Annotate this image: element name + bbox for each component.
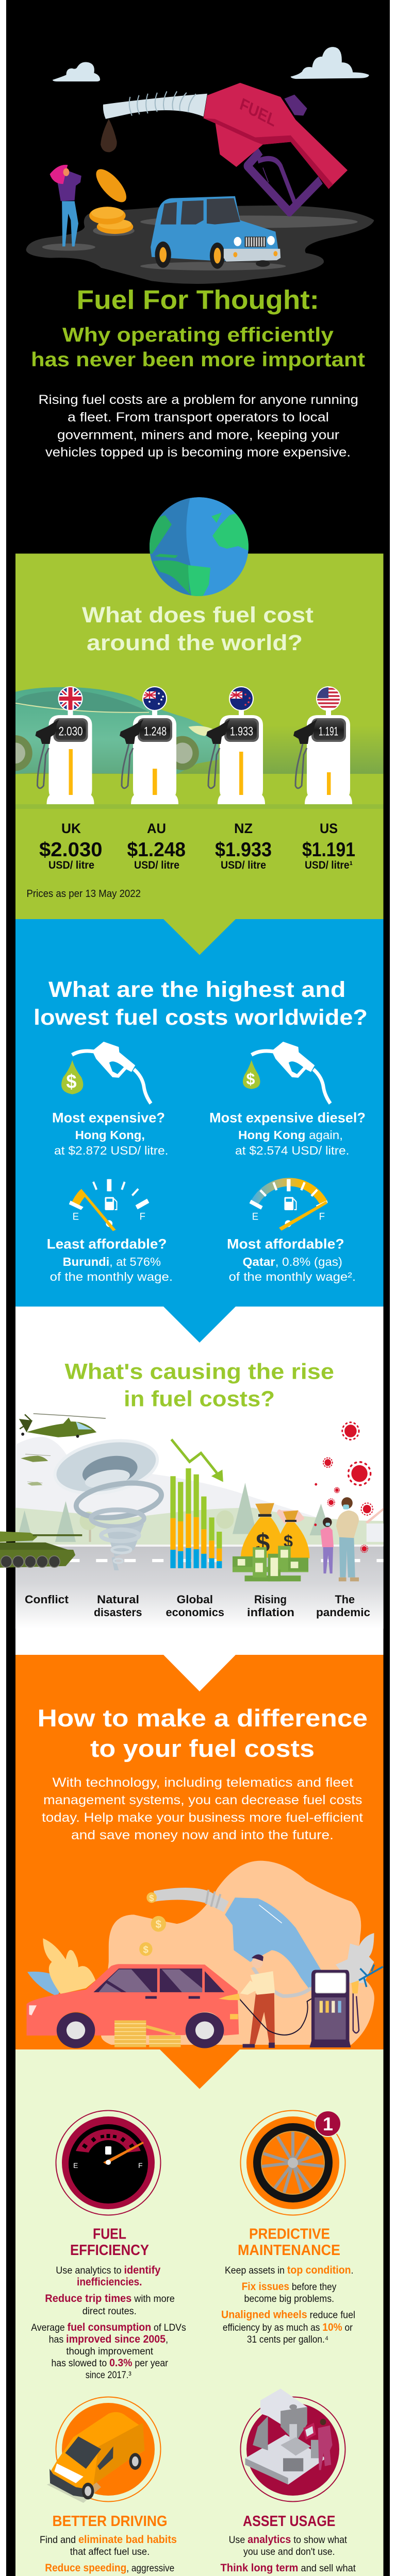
icon: helicopters [20, 1414, 106, 1486]
title: Fuel For Thought: [76, 285, 319, 315]
price: NZ: NZ [234, 821, 253, 836]
icon: fuel nozzle with large dollar drop: $ [66, 1071, 77, 1092]
icon: full fuel gauge: F [319, 1211, 325, 1222]
nozzle handle [247, 151, 321, 212]
icon: fuel nozzle with large dollar drop [61, 1042, 151, 1104]
label: rising inflation: Rising [254, 1593, 287, 1606]
body text: inefficiencies. [77, 2276, 142, 2288]
icon: US pump: 1.191 [319, 724, 338, 739]
panel: white causes of rising fuel cost [0, 1307, 384, 1655]
flag: United Kingdom [59, 687, 81, 710]
hero illustration: fuel nozzle, car and worried person [26, 47, 374, 284]
icon: people wearing masks [321, 1497, 359, 1581]
label: global economics: economics [166, 1606, 224, 1619]
price: UK: $2.030 [39, 839, 102, 861]
label: natural disasters: disasters [94, 1606, 142, 1619]
section heading: lowest fuel costs worldwide? [34, 1005, 368, 1030]
icon: money bags and cash: $ [256, 1528, 270, 1557]
red car [26, 1964, 239, 2048]
icon: right cloud [291, 47, 369, 79]
icon: NZ pump [206, 686, 265, 804]
body text: 31 cents per gallon.⁴ [247, 2334, 328, 2345]
icon: US pump [293, 686, 352, 804]
arrow: falling trend [171, 1439, 223, 1482]
illustration: teal car [0, 687, 219, 774]
icon: falling coins: $ [149, 1893, 154, 1903]
icon: orange van [47, 2397, 160, 2503]
icon: UK pump: 2.030 [59, 724, 82, 739]
body text: that affect fuel use. [70, 2547, 150, 2557]
section heading [34, 977, 368, 1030]
icon: tornado [51, 1433, 163, 1570]
icon: AU pump: 1.248 [144, 724, 167, 739]
icon: viruses [314, 1422, 373, 1552]
price: US: $1.191 [302, 839, 355, 861]
body text: Fix issues before they [242, 2281, 337, 2293]
icon: fuel gauge dial [56, 2110, 161, 2215]
most affordable text: Qatar, 0.8% (gas) [243, 1255, 342, 1268]
puddle [26, 206, 374, 284]
tip: predictive maintenance [221, 2110, 355, 2345]
body text: Keep assets in top condition. [225, 2264, 354, 2276]
icon: money bags and cash [233, 1503, 309, 1581]
icon: tank [0, 1531, 82, 1568]
price: NZ [215, 821, 272, 871]
heading [238, 2226, 340, 2259]
paragraph: With technology, including telematics and fleet [53, 1775, 353, 1790]
price: US: USD/ litre¹ [305, 859, 353, 871]
icon: NZ pump: 1.933 [230, 724, 253, 739]
body text: since 2017.³ [86, 2370, 131, 2381]
intro paragraph [38, 393, 358, 460]
icon: fuel nozzle with small dollar drop: $ [246, 1070, 255, 1088]
most affordable text: of the monthly wage². [229, 1270, 356, 1283]
body text: Think long term and sell what [221, 2562, 356, 2574]
most expensive diesel text: Most expensive diesel? [209, 1110, 366, 1125]
most expensive diesel text: at $2.574 USD/ litre. [235, 1144, 350, 1157]
most affordable text: Most affordable? [227, 1236, 344, 1252]
least affordable text: Burundi, at 576% [63, 1255, 161, 1268]
most expensive diesel text: Hong Kong again, [238, 1128, 343, 1142]
background band and road [15, 725, 384, 809]
label: the pandemic: pandemic [316, 1606, 370, 1619]
body text: efficiency by as much as 10% or [223, 2321, 353, 2333]
paragraph: and save money now and into the future. [71, 1828, 334, 1842]
bar chart: global economics [170, 1439, 223, 1568]
man refuelling [240, 1954, 275, 2048]
icon: left cloud [53, 62, 100, 81]
section heading: How to make a difference [37, 1704, 368, 1732]
worried person [50, 165, 81, 246]
panel: orange how to make a difference [15, 1655, 384, 2049]
subtitle [31, 324, 365, 371]
paragraph: today. Help make your business more fuel-efficient [42, 1810, 363, 1825]
section heading [37, 1704, 368, 1762]
least affordable text: of the monthly wage. [50, 1270, 173, 1283]
least affordable text [47, 1236, 173, 1283]
body text: though improvement [66, 2346, 154, 2357]
price: AU: USD/ litre [134, 859, 179, 871]
label: natural disasters: Natural [97, 1593, 139, 1606]
globe [148, 495, 250, 598]
label: natural disasters [94, 1593, 142, 1619]
body text: Unaligned wheels reduce fuel [221, 2309, 355, 2320]
nozzle body [204, 83, 348, 189]
icon: large blue nozzle [154, 1888, 321, 1990]
section heading: to your fuel costs [90, 1735, 315, 1762]
body text: direct routes. [82, 2306, 137, 2317]
section heading: around the world? [87, 631, 303, 655]
label: global economics [166, 1593, 224, 1619]
icon: leaves [27, 1933, 383, 1996]
heading: ASSET USAGE [243, 2513, 335, 2530]
flag: Australia [143, 687, 166, 710]
heading: FUEL [93, 2226, 126, 2242]
subtitle: has never been more important [31, 349, 365, 371]
body text: Use analytics to identify [56, 2264, 161, 2276]
tip: better driving [40, 2397, 177, 2576]
illustration: man refuelling red car [26, 1861, 383, 2048]
icon: fuel gauge dial: E [73, 2161, 78, 2170]
price: UK: USD/ litre [48, 859, 94, 871]
section heading: in fuel costs? [124, 1387, 275, 1412]
coins [89, 163, 133, 234]
most expensive text: at $2.872 USD/ litre. [54, 1144, 168, 1157]
badge: number one: 1 [323, 2113, 333, 2134]
paragraph [42, 1775, 363, 1842]
blue car [151, 196, 280, 269]
label: global economics: Global [177, 1593, 213, 1606]
body text: become big problems. [244, 2294, 334, 2304]
icon: full fuel gauge: E [252, 1211, 258, 1222]
illustration: road scene [0, 1414, 384, 1629]
least affordable text: Least affordable? [47, 1236, 167, 1252]
body text: Average fuel consumption of LDVs [31, 2321, 186, 2333]
paragraph: management systems, you can decrease fuel costs [43, 1793, 362, 1807]
section heading [65, 1359, 334, 1412]
most expensive diesel text [209, 1110, 366, 1157]
icon: alloy wheel [240, 2110, 345, 2215]
price: UK: UK [61, 821, 81, 836]
hose [253, 1967, 311, 1996]
label: rising inflation [247, 1593, 294, 1619]
body text [221, 2534, 356, 2576]
price: NZ: $1.933 [215, 839, 272, 861]
price: UK [39, 821, 102, 871]
heading: PREDICTIVE [249, 2226, 330, 2242]
flag: United States [317, 687, 340, 708]
body text: Reduce trip times with more [45, 2293, 175, 2304]
tip: asset usage [221, 2388, 356, 2576]
price: US [302, 821, 355, 871]
tip: fuel efficiency [31, 2110, 186, 2381]
most expensive text: Hong Kong, [75, 1128, 145, 1142]
body text: Find and eliminate bad habits [40, 2534, 177, 2546]
flag: New Zealand [230, 687, 253, 710]
intro paragraph: a fleet. From transport operators to local [68, 410, 329, 425]
icon: machine and operator [240, 2388, 345, 2502]
icon: falling coins: $ [155, 1918, 161, 1930]
intro paragraph: Rising fuel costs are a problem for anyone running [38, 393, 358, 407]
icon: falling coins: $ [143, 1944, 148, 1955]
panel: pale green tips [15, 2049, 384, 2576]
subtitle: Why operating efficiently [62, 324, 334, 346]
icon: empty fuel gauge [70, 1179, 148, 1230]
price date note: Prices as per 13 May 2022 [27, 888, 141, 900]
icon: coin stacks [114, 2020, 180, 2047]
label: the pandemic [316, 1593, 370, 1619]
body text [221, 2264, 355, 2345]
label: rising inflation: inflation [247, 1606, 294, 1619]
body text: you use and don't use. [243, 2547, 335, 2557]
body text: Use analytics to show what [229, 2534, 348, 2546]
icon: empty fuel gauge: F [140, 1211, 145, 1222]
price: AU: $1.248 [127, 839, 186, 861]
section heading: What does fuel cost [82, 603, 314, 628]
icon: fuel gauge dial: F [138, 2161, 143, 2170]
body text [31, 2264, 186, 2381]
fuel pump [219, 1970, 359, 2047]
section heading: What are the highest and [48, 977, 345, 1002]
price: AU: AU [147, 821, 166, 836]
oil drop [101, 119, 117, 152]
label: the pandemic: The [335, 1593, 355, 1606]
body text: has slowed to 0.3% per year [52, 2357, 169, 2369]
heading: BETTER DRIVING [53, 2513, 167, 2530]
icon: money bags and cash: $ [284, 1531, 293, 1551]
price: AU [127, 821, 186, 871]
heading [70, 2226, 149, 2259]
panel: blue highest and lowest costs [15, 919, 384, 1307]
body text: Reduce speeding, aggressive [45, 2562, 174, 2574]
label: conflict: Conflict [25, 1593, 69, 1606]
heading: EFFICIENCY [70, 2242, 149, 2259]
icon: UK pump [35, 686, 94, 804]
badge: number one [315, 2111, 341, 2137]
section heading: What's causing the rise [65, 1359, 334, 1384]
icon: empty fuel gauge: E [73, 1211, 79, 1222]
icon: AU pump [120, 686, 178, 804]
most expensive text [52, 1110, 168, 1157]
intro paragraph: vehicles topped up is becoming more expensive. [45, 445, 351, 460]
intro paragraph: government, miners and more, keeping your [57, 428, 339, 442]
price: NZ: USD/ litre [221, 859, 266, 871]
section heading [82, 603, 314, 655]
body text [40, 2534, 177, 2576]
panel: green fuel cost around the world [0, 495, 383, 919]
heading: MAINTENANCE [238, 2242, 340, 2259]
price: US: US [320, 821, 338, 836]
icon: falling coins [139, 1892, 166, 1956]
nozzle spout [103, 91, 207, 119]
icon: full fuel gauge [250, 1179, 327, 1230]
most expensive text: Most expensive? [52, 1110, 165, 1125]
nozzle body: FUEL [238, 94, 278, 131]
body text: has improved since 2005, [49, 2333, 168, 2345]
icon: fuel nozzle with small dollar drop [243, 1042, 331, 1104]
most affordable text [227, 1236, 356, 1283]
